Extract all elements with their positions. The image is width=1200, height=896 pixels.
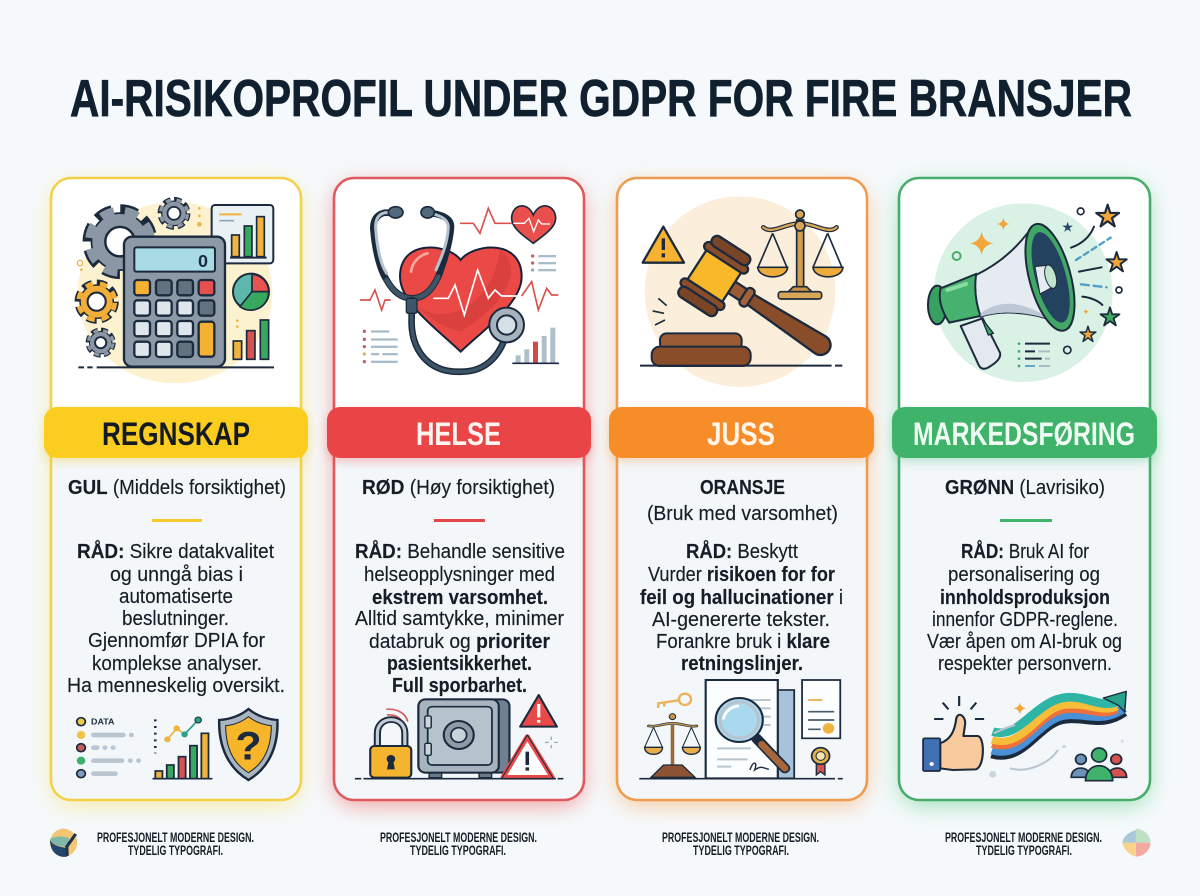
footer caption 2: PROFESJONELT MODERNE DESIGN. (380, 830, 537, 845)
banner: helse: HELSE (416, 416, 501, 452)
advice text: regnskap (67, 539, 285, 697)
icon: gavel, scales and warning (640, 196, 849, 387)
advice text: helse: Alltid samtykke, minimer (355, 608, 564, 630)
advice text: helse (355, 539, 565, 697)
risk level: oransje (647, 477, 838, 525)
icon: data list, chart and shield: DATA (91, 717, 115, 727)
footer caption 2: TYDELIG TYPOGRAFI. (410, 843, 506, 858)
footer caption 4: TYDELIG TYPOGRAFI. (976, 843, 1072, 858)
icon: calculator with gears and charts: 0 (198, 251, 208, 271)
advice text: markedsføring: respekter personvern. (938, 653, 1112, 675)
advice text: markedsføring: personalisering og (948, 564, 1100, 586)
advice text: regnskap: beslutninger. (122, 608, 229, 630)
advice text: helse: ekstrem varsomhet. (372, 587, 548, 609)
footer caption 1: PROFESJONELT MODERNE DESIGN. (97, 830, 254, 845)
icon: scales, document and magnifier (639, 680, 843, 779)
footer caption 4: PROFESJONELT MODERNE DESIGN. (945, 830, 1102, 845)
advice text: markedsføring: innenfor GDPR-reglene. (932, 609, 1118, 631)
footer caption 2 (380, 830, 537, 858)
icon: data list, chart and shield (77, 709, 277, 780)
icon: thumbs up, wave and people (923, 691, 1127, 781)
advice text: helse: Full sporbarhet. (392, 675, 527, 697)
advice text: regnskap: RÅD: Sikre datakvalitet (77, 539, 274, 563)
advice text: helse: RÅD: Behandle sensitive (355, 539, 565, 563)
panel: markedsføring (892, 178, 1157, 806)
icon: lock, safe and warnings (355, 695, 563, 779)
advice text: juss: retningslinjer. (681, 653, 803, 675)
banner: regnskap (44, 407, 308, 462)
advice text: juss: AI-genererte tekster. (652, 609, 830, 631)
advice text: markedsføring: Vær åpen om AI-bruk og (927, 631, 1122, 653)
banner: helse (327, 407, 591, 462)
advice text: juss: feil og hallucinationer i (640, 587, 843, 609)
advice text: regnskap: Gjennomfør DPIA for (88, 630, 265, 652)
footer caption 1: TYDELIG TYPOGRAFI. (128, 843, 223, 858)
icon: calculator with gears and charts (77, 200, 274, 383)
panel: regnskap (44, 178, 308, 806)
risk level: rød: RØD (Høy forsiktighet) (362, 477, 555, 499)
risk level: grønn: GRØNN (Lavrisiko) (945, 477, 1105, 499)
footer caption 4 (945, 830, 1102, 858)
advice text: helse: helseopplysninger med (364, 564, 555, 586)
banner: regnskap: REGNSKAP (102, 416, 250, 452)
footer caption 3: PROFESJONELT MODERNE DESIGN. (662, 830, 819, 845)
logo: bottom left (50, 829, 77, 857)
advice text: regnskap: og unngå bias i (110, 564, 243, 586)
footer caption 1 (97, 830, 254, 858)
advice text: juss: RÅD: Beskytt (686, 539, 798, 563)
banner: juss: JUSS (707, 416, 775, 452)
advice text: markedsføring: RÅD: Bruk AI for (961, 539, 1089, 563)
banner: markedsføring: MARKEDSFØRING (913, 416, 1135, 452)
risk level: oransje: (Bruk med varsomhet) (647, 503, 838, 525)
advice text: juss: Vurder risikoen for for (648, 564, 835, 586)
logo: bottom right (1122, 829, 1150, 857)
footer caption 3: TYDELIG TYPOGRAFI. (693, 843, 789, 858)
panel: helse (327, 178, 591, 806)
advice text: helse: pasientsikkerhet. (387, 653, 532, 675)
advice text: juss: Forankre bruk i klare (656, 631, 830, 653)
icon: stethoscope and heart (360, 206, 559, 372)
advice text: markedsføring (927, 539, 1122, 675)
advice text: regnskap: automatiserte (119, 586, 233, 608)
advice text: markedsføring: innholdsproduksjon (940, 587, 1110, 609)
advice text: regnskap: Ha menneskelig oversikt. (67, 675, 285, 697)
risk level: oransje: ORANSJE (700, 477, 785, 499)
icon: megaphone and stars (928, 203, 1127, 382)
advice text: juss (640, 539, 843, 675)
risk level: gul: GUL (Middels forsiktighet) (68, 477, 286, 499)
banner: juss (609, 407, 874, 462)
banner: markedsføring (892, 407, 1157, 462)
advice text: regnskap: komplekse analyser. (92, 653, 262, 675)
footer caption 3 (662, 830, 819, 858)
advice text: helse: databruk og prioriter (369, 631, 550, 653)
icon: data list, chart and shield: ? (235, 723, 262, 768)
panel: juss (609, 178, 874, 806)
